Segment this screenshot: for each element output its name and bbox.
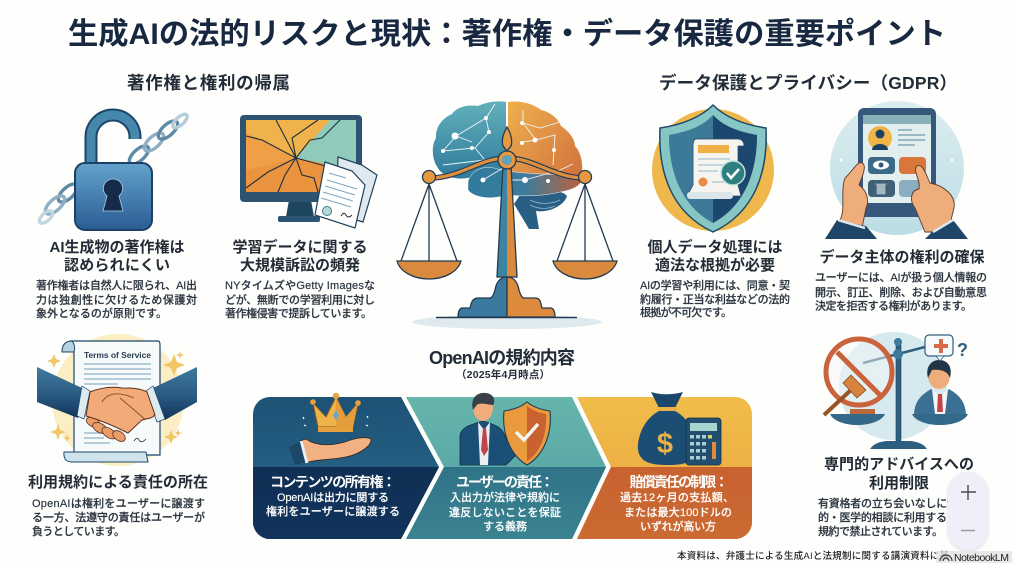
icon: money bag and calculator bbox=[638, 392, 721, 465]
heading: copyright section: 著作権と権利の帰属 bbox=[127, 73, 290, 93]
text block: data subject rights: 開示、訂正、削除、および自動意思 bbox=[815, 285, 987, 299]
text block: liability limit: いずれが高い方 bbox=[640, 519, 716, 533]
text block: terms of service responsibility: 利用規約による責任の所在 bbox=[28, 473, 208, 491]
text block: professional advice restriction: 専門的アドバイスへの bbox=[824, 455, 974, 473]
icon: cracked monitor and documents bbox=[240, 115, 377, 228]
text block: user responsibility: 入出力が法律や規約に bbox=[450, 490, 560, 504]
text block: training data lawsuits: 著作権侵害で提訴しています。 bbox=[225, 306, 372, 320]
text block: AI output copyright: 象外となるのが原則です。 bbox=[36, 306, 167, 320]
heading: OpenAI terms bbox=[429, 348, 575, 381]
text block: training data lawsuits bbox=[225, 238, 375, 320]
panel: OpenAI terms chevron band bbox=[253, 397, 760, 539]
text block: AI output copyright bbox=[36, 238, 197, 320]
badge: NotebookLM bbox=[936, 551, 1012, 563]
text block: liability limit: または最大100ドルの bbox=[624, 505, 732, 519]
icon: handshake over terms of service bbox=[37, 334, 197, 466]
text block: lawful basis: 根拠が不可欠です。 bbox=[640, 305, 732, 319]
icon: money bag and calculator: $ bbox=[657, 428, 673, 460]
text block: data subject rights: 決定を拒否する権利があります。 bbox=[815, 298, 972, 312]
text block: terms of service responsibility bbox=[28, 473, 208, 538]
panel: liability limit bbox=[577, 397, 760, 539]
icon: padlock and chains bbox=[37, 112, 189, 230]
icon: prohibited gavel and scale with professional bbox=[824, 332, 968, 449]
zoom control bbox=[948, 472, 988, 551]
text block: lawful basis: AIの学習や利用には、同意・契 bbox=[640, 278, 790, 292]
title: 生成AIの法的リスクと現状：著作権・データ保護の重要ポイント bbox=[68, 17, 946, 51]
text block: content ownership bbox=[266, 474, 400, 518]
heading: OpenAI terms: OpenAIの規約内容 bbox=[429, 348, 575, 368]
text block: data subject rights: ユーザーには、AIが扱う個人情報の bbox=[815, 270, 987, 284]
text block: AI output copyright: AI生成物の著作権は bbox=[50, 238, 184, 256]
icon: prohibited gavel and scale with professional: ? bbox=[957, 340, 968, 360]
text block: training data lawsuits: 大規模訴訟の頻発 bbox=[240, 256, 360, 274]
text block: user responsibility: する義務 bbox=[483, 519, 527, 533]
text block: liability limit: 賠償責任の制限： bbox=[630, 474, 728, 490]
text block: training data lawsuits: NYタイムズやGetty Imagesな bbox=[225, 278, 375, 292]
text block: liability limit: 過去12ヶ月の支払額、 bbox=[620, 490, 734, 504]
text block: training data lawsuits: どが、無断での学習利用に対し bbox=[225, 292, 375, 306]
text block: lawful basis bbox=[640, 238, 790, 319]
icon: brain on balance scale bbox=[397, 101, 617, 329]
icon: businessperson with shield bbox=[460, 393, 550, 465]
heading: OpenAI terms: （2025年4月時点） bbox=[456, 368, 550, 381]
text block: terms of service responsibility: OpenAIは権利をユーザーに譲渡す bbox=[32, 496, 205, 510]
icon: shield with document bbox=[652, 105, 774, 232]
panel: content ownership bbox=[253, 397, 439, 539]
text block: AI output copyright: 認められにくい bbox=[64, 257, 170, 274]
icon: crown over hand bbox=[289, 393, 371, 465]
text block: lawful basis: 約履行・正当な利益などの法的 bbox=[640, 292, 790, 306]
text block: professional advice restriction bbox=[818, 455, 974, 538]
text block: lawful basis: 適法な根拠が必要 bbox=[655, 256, 775, 274]
text block: lawful basis: 個人データ処理には bbox=[648, 238, 782, 256]
text block: professional advice restriction: 利用制限 bbox=[869, 475, 929, 492]
text block: professional advice restriction: 的・医学的相談に利用する bbox=[818, 510, 947, 524]
text block: terms of service responsibility: 負うとしています。 bbox=[32, 524, 125, 538]
text block: data subject rights bbox=[815, 248, 987, 312]
text block: content ownership: OpenAIは出力に関する bbox=[277, 491, 389, 504]
panel: user responsibility bbox=[406, 397, 606, 539]
text block: liability limit bbox=[620, 474, 734, 533]
icon: hands on tablet bbox=[825, 101, 968, 239]
text block: professional advice restriction: 有資格者の立ち会いなしに法 bbox=[818, 496, 958, 510]
heading: data protection section: データ保護とプライバシー（GDPR） bbox=[659, 73, 957, 93]
footer note: 本資料は、弁護士による生成AIと法規制に関する講演資料に基 bbox=[677, 550, 949, 562]
text block: user responsibility: ユーザーの責任： bbox=[456, 474, 554, 490]
text block: content ownership: コンテンツの所有権： bbox=[270, 474, 396, 490]
text block: AI output copyright: 力は独創性に欠けるため保護対 bbox=[36, 292, 197, 306]
text block: AI output copyright: 著作権者は自然人に限られ、AI出 bbox=[36, 278, 197, 292]
text block: training data lawsuits: 学習データに関する bbox=[232, 238, 368, 256]
text block: user responsibility: 違反しないことを保証 bbox=[449, 505, 561, 519]
text block: professional advice restriction: 規約で禁止されています。 bbox=[818, 524, 943, 538]
text block: data subject rights: データ主体の権利の確保 bbox=[820, 248, 984, 266]
text block: user responsibility bbox=[449, 474, 561, 533]
text block: content ownership: 権利をユーザーに譲渡する bbox=[266, 504, 400, 518]
icon: handshake over terms of service: Terms of Service bbox=[84, 350, 151, 360]
text block: terms of service responsibility: る一方、法遵守の責任はユーザーが bbox=[32, 510, 205, 524]
